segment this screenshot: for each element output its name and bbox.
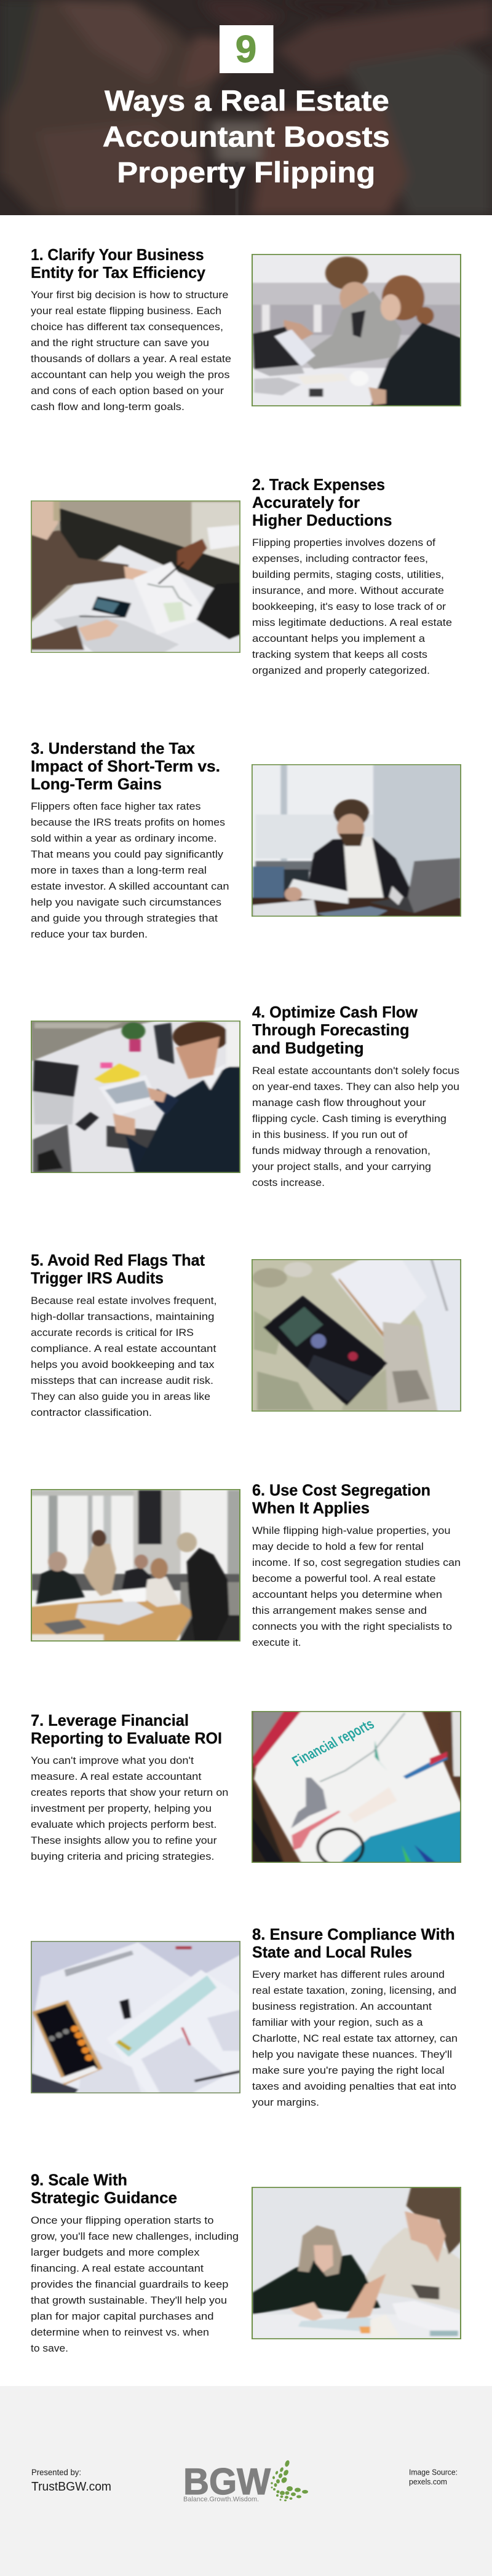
heading: step 6: 6. Use Cost Segregation xyxy=(252,1480,430,1499)
text: step 2 body: bookkeeping, it's easy to lose track of or xyxy=(252,601,446,612)
heading: step 1 xyxy=(31,245,206,282)
title: Property Flipping xyxy=(117,156,375,188)
text: step 5 body: high-dollar transactions, maintaining xyxy=(31,1311,214,1322)
text: step 4 body: funds midway through a renovation, xyxy=(252,1145,430,1156)
text: step 9 body: financing. A real estate accountant xyxy=(31,2262,204,2274)
text: step 6 body: may decide to hold a few for rental xyxy=(252,1541,424,1552)
text: step 8 body: help you navigate these nuances. They'll xyxy=(252,2049,452,2060)
text: step 9 body: grow, you'll face new challenges, including xyxy=(31,2230,239,2242)
panel: step 9 xyxy=(31,2170,461,2354)
panel: step 1 xyxy=(31,245,461,413)
heading: step 3 xyxy=(31,739,220,793)
text: step 2 body: organized and properly categorized. xyxy=(252,665,430,676)
heading: step 7: 7. Leverage Financial xyxy=(31,1711,189,1729)
panel: footer xyxy=(0,2386,492,2576)
text: step 3 body: Flippers often face higher tax rates xyxy=(31,800,200,812)
heading: step 7: Reporting to Evaluate ROI xyxy=(31,1729,222,1747)
text: presented by xyxy=(31,2467,111,2494)
panel: step 7 xyxy=(31,1711,461,1866)
text: step 6 body: accountant helps you determine when xyxy=(252,1589,442,1600)
heading: step 7 xyxy=(31,1711,222,1747)
heading: step 2: Accurately for xyxy=(252,493,360,512)
text: step 9 body: plan for major capital purchases and xyxy=(31,2310,214,2322)
text: step 4 body: Real estate accountants don't solely focus xyxy=(252,1065,459,1077)
photo: man in suit reading paper at laptop xyxy=(252,764,461,917)
text: step 8 body: Charlotte, NC real estate tax attorney, can xyxy=(252,2033,458,2044)
photo: team analyzing reports at white desk xyxy=(31,1021,240,1173)
photo: income statement, tax checklist and phone calculator xyxy=(31,1941,240,2093)
photo: calculator on dollar bills with notepad xyxy=(252,1259,461,1412)
text: step 2 body: expenses, including contractor fees, xyxy=(252,553,428,564)
text: step 1 body: your real estate flipping business. Each xyxy=(31,305,221,317)
text: image source xyxy=(409,2468,458,2486)
text: step 1 body: choice has different tax consequences, xyxy=(31,321,223,333)
text: step 7 body: You can't improve what you don't xyxy=(31,1755,194,1766)
logo: BGW: BGW xyxy=(183,2461,271,2502)
text: step 2 body: accountant helps you implement a xyxy=(252,633,426,644)
text: step 1 body: thousands of dollars a year. A real estate xyxy=(31,353,231,365)
heading: step 4: 4. Optimize Cash Flow xyxy=(252,1003,418,1021)
text: step 1 body: cash flow and long-term goals. xyxy=(31,401,184,413)
text: step 2 body: miss legitimate deductions. A real estate xyxy=(252,617,452,628)
panel: step 2 xyxy=(31,475,452,676)
text: step 4 body: costs increase. xyxy=(252,1177,325,1188)
text: step 7 body: investment per property, helping you xyxy=(31,1803,212,1814)
heading: step 3: Long-Term Gains xyxy=(31,775,162,793)
text: step 1 body: and the right structure can save you xyxy=(31,337,209,349)
text: step 6 body: While flipping high-value properties, you xyxy=(252,1525,450,1536)
panel: step 5 xyxy=(31,1250,461,1418)
panel: header xyxy=(0,0,492,215)
panel: step 8 xyxy=(31,1925,458,2108)
text: step 7 body: creates reports that show your return on xyxy=(31,1787,228,1798)
heading: step 4 xyxy=(252,1003,418,1057)
heading: step 8: 8. Ensure Compliance With xyxy=(252,1925,455,1943)
title: Ways a Real Estate xyxy=(105,84,389,117)
text: step 5 body: compliance. A real estate accountant xyxy=(31,1343,216,1354)
heading: step 9: 9. Scale With xyxy=(31,2170,127,2189)
panel: step 4 xyxy=(31,1003,459,1188)
text: step 9 body: larger budgets and more complex xyxy=(31,2246,200,2258)
text: step 8 body: taxes and avoiding penalties that eat into xyxy=(252,2080,456,2092)
heading: step 4: and Budgeting xyxy=(252,1039,364,1057)
heading: step 5: Trigger IRS Audits xyxy=(31,1269,164,1287)
heading: step 6 xyxy=(252,1480,430,1517)
text: step 3 body: because the IRS treats profits on homes xyxy=(31,816,225,828)
panel: step 3 xyxy=(31,739,461,940)
text: step 7 body: These insights allow you to refine your xyxy=(31,1835,217,1846)
text: step 6 body xyxy=(252,1525,461,1648)
heading: step 2: Higher Deductions xyxy=(252,511,392,529)
text: step 7 body: measure. A real estate accountant xyxy=(31,1771,202,1782)
text: step 5 body xyxy=(31,1295,216,1418)
title: Accountant Boosts xyxy=(103,121,390,152)
text: step 6 body: this arrangement makes sense and xyxy=(252,1605,427,1616)
text: step 2 body: Flipping properties involves dozens of xyxy=(252,537,435,548)
text: step 8 body: Every market has different rules around xyxy=(252,1969,445,1980)
text: step 2 body: tracking system that keeps all costs xyxy=(252,649,427,660)
panel: step 6 xyxy=(31,1480,461,1648)
text: step 4 body: your project stalls, and your carrying xyxy=(252,1161,431,1172)
heading: step 6: When It Applies xyxy=(252,1499,370,1517)
text: step 2 body: building permits, staging costs, utilities, xyxy=(252,569,444,580)
number badge: 9 xyxy=(236,28,256,71)
text: step 4 body: in this business. If you run out of xyxy=(252,1129,408,1140)
text: step 1 body: Your first big decision is how to structure xyxy=(31,289,228,301)
text: step 3 body: help you navigate such circumstances xyxy=(31,896,221,908)
text: step 7 body: evaluate which projects perform best. xyxy=(31,1819,216,1830)
text: step 7 body: buying criteria and pricing strategies. xyxy=(31,1851,214,1862)
text: image source: Image Source: xyxy=(409,2468,458,2476)
text: step 9 body: provides the financial guardrails to keep xyxy=(31,2278,228,2290)
text: step 6 body: income. If so, cost segregation studies can xyxy=(252,1557,461,1568)
text: step 4 body: on year-end taxes. They can also help you xyxy=(252,1081,459,1092)
text: step 6 body: execute it. xyxy=(252,1637,301,1648)
text: step 8 body: business registration. An accountant xyxy=(252,2001,432,2012)
number badge xyxy=(220,25,273,73)
heading: step 3: Impact of Short-Term vs. xyxy=(31,757,220,775)
text: step 3 body: more in taxes than a long-term real xyxy=(31,864,207,876)
heading: step 1: 1. Clarify Your Business xyxy=(31,245,204,264)
heading: step 2 xyxy=(252,475,392,529)
text: step 1 body xyxy=(31,289,231,413)
text: step 8 body: real estate taxation, zoning, licensing, and xyxy=(252,1985,456,1996)
text: step 1 body: accountant can help you weigh the pros xyxy=(31,369,230,381)
text: step 3 body: and guide you through strategies that xyxy=(31,912,218,924)
heading: step 5 xyxy=(31,1250,205,1287)
text: step 8 body: familiar with your region, such as a xyxy=(252,2017,423,2028)
text: step 2 body: insurance, and more. Without accurate xyxy=(252,585,444,596)
heading: step 5: 5. Avoid Red Flags That xyxy=(31,1250,205,1269)
text: step 9 body: Once your flipping operation starts to xyxy=(31,2214,214,2226)
heading: step 1: Entity for Tax Efficiency xyxy=(31,263,206,282)
heading: step 9: Strategic Guidance xyxy=(31,2189,177,2207)
heading: step 3: 3. Understand the Tax xyxy=(31,739,196,757)
photo: two people working over documents xyxy=(252,2187,461,2339)
text: step 5 body: They can also guide you in areas like xyxy=(31,1391,210,1402)
heading: step 4: Through Forecasting xyxy=(252,1021,410,1039)
text: step 5 body: accurate records is critical for IRS xyxy=(31,1327,194,1338)
text: step 8 body: make sure you're paying the right local xyxy=(252,2064,445,2076)
text: step 3 body: reduce your tax burden. xyxy=(31,928,148,940)
text: step 3 body xyxy=(31,800,229,940)
photo: business team meeting around table xyxy=(31,1489,240,1642)
text: step 3 body: sold within a year as ordinary income. xyxy=(31,832,216,844)
text: step 9 body: to save. xyxy=(31,2342,68,2354)
text: step 9 body xyxy=(31,2214,239,2354)
text: step 4 body: manage cash flow throughout your xyxy=(252,1097,426,1108)
text: step 5 body: contractor classification. xyxy=(31,1407,152,1418)
photo: financial reports document with magnifying glass xyxy=(252,1711,461,1866)
text: step 2 body xyxy=(252,537,452,676)
text: step 3 body: That means you could pay significantly xyxy=(31,848,224,860)
title xyxy=(103,84,390,188)
text: step 5 body: helps you avoid bookkeeping and tax xyxy=(31,1359,215,1370)
text: step 3 body: estate investor. A skilled accountant can xyxy=(31,880,229,892)
text: step 4 body: flipping cycle. Cash timing is everything xyxy=(252,1113,446,1124)
text: step 1 body: and cons of each option based on your xyxy=(31,385,224,397)
text: step 7 body xyxy=(31,1755,228,1862)
text: presented by: Presented by: xyxy=(31,2467,81,2477)
photo: two colleagues reviewing documents at a laptop xyxy=(252,254,461,406)
heading: step 8 xyxy=(252,1925,455,1961)
photo: reviewing printed chart with phone and pen xyxy=(31,500,240,653)
heading: step 2: 2. Track Expenses xyxy=(252,475,385,494)
header background photo: hands holding house key xyxy=(0,0,492,215)
text: step 8 body: your margins. xyxy=(252,2096,319,2108)
heading: step 8: State and Local Rules xyxy=(252,1943,412,1961)
text: step 9 body: that growth sustainable. They'll help you xyxy=(31,2294,227,2306)
text: step 5 body: Because real estate involves frequent, xyxy=(31,1295,216,1306)
text: step 5 body: missteps that can increase audit risk. xyxy=(31,1375,213,1386)
text: step 6 body: become a powerful tool. A real estate xyxy=(252,1573,435,1584)
text: image source: pexels.com xyxy=(409,2477,447,2486)
logo: BGW: Balance.Growth.Wisdom. xyxy=(183,2496,259,2503)
heading: step 9 xyxy=(31,2170,177,2207)
text: presented by: TrustBGW.com xyxy=(31,2480,111,2494)
text: step 6 body: connects you with the right specialists to xyxy=(252,1621,452,1632)
text: step 4 body xyxy=(252,1065,459,1188)
text: step 9 body: determine when to reinvest vs. when xyxy=(31,2326,209,2338)
icon: green leaf dots xyxy=(271,2460,308,2501)
text: step 8 body xyxy=(252,1969,458,2108)
logo: BGW xyxy=(183,2460,308,2503)
